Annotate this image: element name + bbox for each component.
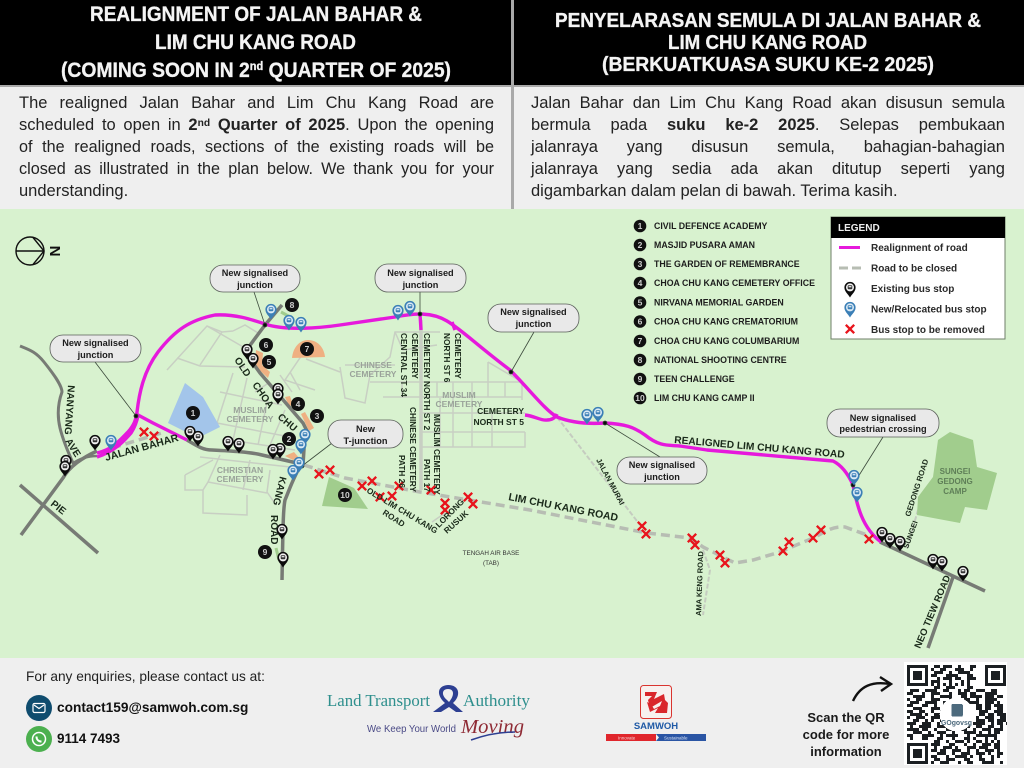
site list: CHOA CHU KANG CEMETERY OFFICE (654, 278, 815, 288)
road labels: CHU (275, 412, 299, 434)
text block: Malay notice: Jalan Bahar dan Lim Chu Kang Road akan disusun semula (531, 94, 1005, 112)
numbered site markers: 1 (191, 408, 196, 418)
road labels: CENTRAL ST 34 (399, 333, 409, 397)
text: scan prompt: code for more (803, 727, 889, 742)
realigned roads (97, 314, 881, 542)
logo: Samwoh (606, 685, 706, 741)
panel divider (511, 0, 514, 209)
callouts (50, 264, 939, 484)
site list: 9 (638, 374, 643, 384)
callouts: New signalised (222, 268, 288, 278)
site list: 2 (638, 240, 643, 250)
road labels: KANG (270, 475, 288, 507)
parcel: National Shooting Centre (281, 312, 292, 318)
callouts: junction (515, 319, 552, 329)
numbered site markers: 8 (290, 300, 295, 310)
text block: English notice: closed as illustrated in the plan below. We thank you for your (19, 160, 494, 178)
site list: 4 (638, 278, 643, 288)
road labels: NORTH ST 5 (473, 417, 524, 427)
road labels: GEDONG (937, 477, 973, 486)
panel: English header: LIM CHU KANG ROAD (155, 31, 356, 54)
panel: English header: (COMING SOON IN 2 (61, 59, 266, 82)
road labels: ROAD (268, 515, 279, 544)
callouts: junction (643, 472, 680, 482)
road labels: NORTH ST 6 (442, 333, 452, 383)
grey area labels (217, 360, 483, 484)
site list: MASJID PUSARA AMAN (654, 240, 755, 250)
text block: English notice: of the realigned roads, sections of the existing roads will be (19, 138, 494, 156)
road labels: RUSUK (442, 508, 470, 535)
numbered site markers: 6 (264, 340, 269, 350)
callouts: junction (236, 280, 273, 290)
road labels: CHOA (250, 380, 275, 411)
icon: curved arrow to QR code (852, 676, 893, 702)
contact: email: contact159@samwoh.com.sg (57, 700, 248, 715)
numbered site markers: 2 (287, 434, 292, 444)
numbered site markers: 10 (340, 490, 350, 500)
text block: English notice: understanding. (19, 182, 128, 200)
site list: TEEN CHALLENGE (654, 374, 735, 384)
parcel: Sungei Gedong Camp (917, 432, 997, 523)
text block: Malay notice: jalanraya yang disusun semula, bahagian-bahagian (531, 138, 1005, 156)
callouts: pedestrian crossing (839, 424, 927, 434)
text block: Malay notice (530, 94, 1005, 200)
panel: route map (0, 209, 1024, 658)
callouts: junction (77, 350, 114, 360)
road labels: PATH 26 (397, 455, 407, 488)
existing bus stops (59, 344, 969, 582)
new or relocated bus stops (105, 301, 863, 502)
numbered site markers: 5 (267, 357, 272, 367)
road labels: CEMETERY (453, 333, 463, 379)
legend: Realignment of road (871, 243, 968, 254)
QR code (904, 662, 1007, 765)
text block: English notice: The realigned Jalan Bahar and Lim Chu Kang Road are (19, 94, 494, 112)
text block: Malay notice: jalanraya yang sedia ada akan ditutup seperti yang (531, 160, 1005, 178)
text block: Malay notice: digambarkan dalam pelan di bawah. Terima kasih. (531, 182, 898, 200)
parcel: Lim Chu Kang Camp II (322, 477, 368, 509)
road labels: AVE (62, 437, 82, 460)
grey area labels: CHINESE (354, 360, 392, 370)
existing roads (20, 305, 985, 648)
north arrow: N (47, 246, 64, 256)
road labels: JALAN BAHAR (104, 432, 180, 464)
cemetery road network (167, 325, 525, 515)
road labels: CEMETERY (477, 406, 524, 416)
north arrow (16, 237, 64, 265)
logo: Samwoh: Innovate (618, 736, 636, 740)
callouts: New signalised (387, 268, 454, 278)
callouts: New signalised (850, 413, 916, 423)
grey area labels: CEMETERY (217, 474, 264, 484)
road labels: TENGAH AIR BASE (463, 550, 519, 557)
site list: 3 (638, 259, 643, 269)
callouts: New signalised (500, 307, 567, 317)
site list: 7 (638, 336, 643, 346)
grey area labels: CHRISTIAN (217, 465, 263, 475)
road labels: OLD (232, 356, 252, 379)
site list: 10 (635, 393, 645, 403)
road labels: LIM CHU KANG ROAD (507, 491, 619, 524)
callouts: New signalised (629, 460, 695, 470)
lake: Civil Defence Academy (168, 383, 220, 437)
road labels: OLD LIM CHU KANG (365, 485, 440, 535)
site list: CHOA CHU KANG COLUMBARIUM (654, 336, 799, 346)
road labels: CEMETERY NORTH ST 2 (422, 333, 432, 431)
roads to be closed (112, 432, 867, 563)
text: scan prompt: information (810, 744, 882, 759)
road labels: AMA KENG ROAD (694, 550, 705, 616)
panel: English header: REALIGNMENT OF JALAN BAHAR & (90, 3, 422, 26)
site list: CHOA CHU KANG CREMATORIUM (654, 316, 798, 326)
logo: Land Transport Authority (327, 685, 531, 741)
logo: Land Transport Authority: We Keep Your World (367, 724, 456, 735)
logo: Land Transport Authority: Land Transport (327, 691, 430, 710)
callouts: New signalised (62, 338, 129, 348)
grey area labels: MUSLIM (233, 405, 267, 415)
road labels: CAMP (943, 487, 967, 496)
grey area labels: CEMETERY (227, 414, 274, 424)
red crosses: bus stops to be removed (140, 428, 873, 567)
text block: English notice: scheduled to open in 2nd Quarter of 2025. Upon the opening (19, 116, 494, 134)
grey area labels: CEMETERY (350, 369, 397, 379)
legend: New/Relocated bus stop (871, 304, 987, 316)
text: scan prompt (803, 710, 889, 759)
panel: English header (0, 0, 511, 85)
panel: Malay header: PENYELARASAN SEMULA DI JALAN BAHAR & (555, 10, 981, 32)
grey area labels: MUSLIM (442, 390, 476, 400)
text block: English notice (19, 94, 494, 200)
legend: LEGEND (838, 223, 880, 234)
road labels: REALIGNED LIM CHU KANG ROAD (674, 435, 845, 461)
road labels: MUSLIM CEMETERY (432, 414, 442, 495)
logo: Samwoh: Sustainable (664, 736, 688, 740)
site list: 6 (638, 316, 643, 326)
site list: 8 (638, 355, 643, 365)
road labels: PIE (48, 499, 68, 517)
road labels (48, 333, 973, 650)
panel: Malay header (514, 0, 1024, 85)
callouts: New (356, 424, 376, 434)
site list: 5 (638, 298, 643, 308)
road labels: NANYANG (62, 385, 76, 435)
road labels: ROAD (381, 507, 407, 529)
numbered site markers: 9 (263, 547, 268, 557)
numbered site markers: 4 (296, 399, 301, 409)
road labels: SUNGEI (901, 520, 920, 550)
road labels: NEO TIEW ROAD (913, 574, 953, 650)
road labels: PATH 17 (422, 459, 432, 492)
numbered site markers (186, 298, 352, 559)
parcels: memorial sites (255, 340, 325, 460)
legend: Existing bus stop (871, 284, 954, 295)
road labels: JALAN MURAI (594, 457, 626, 507)
road labels: GEDONG ROAD (903, 458, 930, 518)
numbered site markers: 3 (315, 411, 320, 421)
road labels: SUNGEI (940, 467, 970, 476)
text: enquiries prompt: For any enquiries, please contact us at: (26, 669, 265, 684)
panel: English header: QUARTER OF 2025) (263, 59, 451, 82)
site list: NATIONAL SHOOTING CENTRE (654, 355, 787, 365)
callouts: junction (402, 280, 439, 290)
legend: Road to be closed (871, 264, 957, 274)
site list: THE GARDEN OF REMEMBRANCE (654, 259, 800, 269)
road labels: LORONG (433, 497, 466, 529)
site list: LIM CHU KANG CAMP II (654, 393, 755, 403)
road labels: (TAB) (483, 560, 499, 567)
panel: Malay header: LIM CHU KANG ROAD (668, 32, 867, 54)
legend (831, 217, 1005, 339)
site list (634, 220, 815, 404)
text: scan prompt: Scan the QR (807, 710, 885, 725)
numbered site markers: 7 (305, 344, 310, 354)
contact: phone (26, 726, 120, 752)
panel: Malay header: (BERKUATKUASA SUKU KE-2 2025) (602, 54, 934, 76)
legend: Bus stop to be removed (871, 325, 985, 336)
header rule (0, 85, 1024, 87)
junction dots and callout leaders (95, 292, 883, 487)
callouts: T-junction (344, 436, 388, 446)
site list: CIVIL DEFENCE ACADEMY (654, 221, 768, 231)
panel: English header: nd (250, 59, 263, 73)
road labels: CHINESE CEMETERY (408, 407, 418, 492)
logo: Land Transport Authority: Authority (463, 691, 531, 710)
QR code: GOgovsg (941, 720, 972, 727)
contact: phone: 9114 7493 (57, 731, 120, 746)
text block: Malay notice: bermula pada suku ke-2 2025. Selepas pembukaan (531, 116, 1005, 134)
grey area labels: CEMETERY (436, 399, 483, 409)
logo: Land Transport Authority: Moving (460, 716, 524, 738)
map background (0, 209, 1024, 658)
parcel: Teen Challenge (276, 548, 279, 560)
road labels: CEMETERY (410, 333, 420, 379)
contact: email (26, 695, 248, 721)
logo: Samwoh: SAMWOH (634, 721, 678, 732)
site list: NIRVANA MEMORIAL GARDEN (654, 298, 784, 308)
site list: 1 (638, 221, 643, 231)
